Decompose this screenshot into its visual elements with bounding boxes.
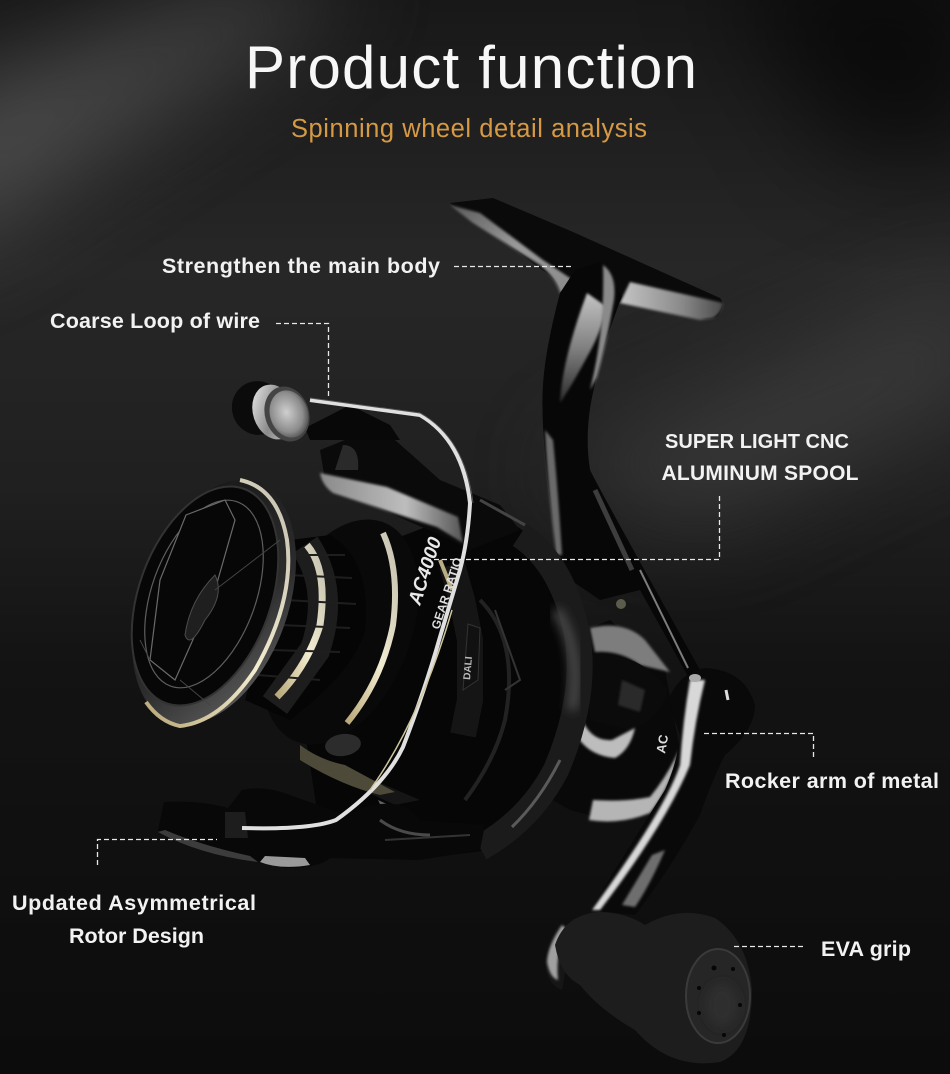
label: strengthen the main body: Strengthen the main body xyxy=(162,254,440,278)
lower bail arm xyxy=(158,788,485,868)
spool front face xyxy=(101,457,327,747)
spool label text: AC4000 xyxy=(404,534,446,608)
rear spool flange xyxy=(231,496,480,768)
bail wire xyxy=(242,398,473,828)
label: updated asymmetrical rotor design: Updated Asymmetrical xyxy=(12,891,256,915)
line roller xyxy=(224,374,317,447)
label: rocker arm of metal: Rocker arm of metal xyxy=(725,769,939,793)
label: updated asymmetrical rotor design: Rotor Design xyxy=(69,924,204,948)
label: eva grip: EVA grip xyxy=(821,937,911,961)
label: coarse loop of wire xyxy=(50,309,328,398)
rotor back and rear housing: AC xyxy=(653,733,671,755)
rear spool flange: DALI xyxy=(462,656,475,680)
spool barrel xyxy=(245,535,366,720)
label: super light cnc aluminum spool: SUPER LIGHT CNC xyxy=(665,431,849,453)
rotor back and rear housing xyxy=(535,620,680,821)
crank handle xyxy=(590,668,755,915)
label: updated asymmetrical rotor design xyxy=(12,840,256,948)
subtitle: Spinning wheel detail analysis xyxy=(291,115,647,143)
upper bail arm xyxy=(305,405,525,550)
EVA grip knob xyxy=(545,912,752,1063)
rear spool flange: GEAR RATIO xyxy=(429,556,465,631)
label: coarse loop of wire: Coarse Loop of wire xyxy=(50,309,260,333)
rotor cup and ring xyxy=(300,510,589,860)
reel stem xyxy=(542,262,700,680)
fishing reel xyxy=(101,198,755,1063)
label: rocker arm of metal xyxy=(704,734,939,793)
title: Product function xyxy=(245,34,697,101)
label: super light cnc aluminum spool xyxy=(422,431,859,560)
label: super light cnc aluminum spool: ALUMINUM SPOOL xyxy=(662,462,859,485)
reel foot xyxy=(450,198,723,320)
